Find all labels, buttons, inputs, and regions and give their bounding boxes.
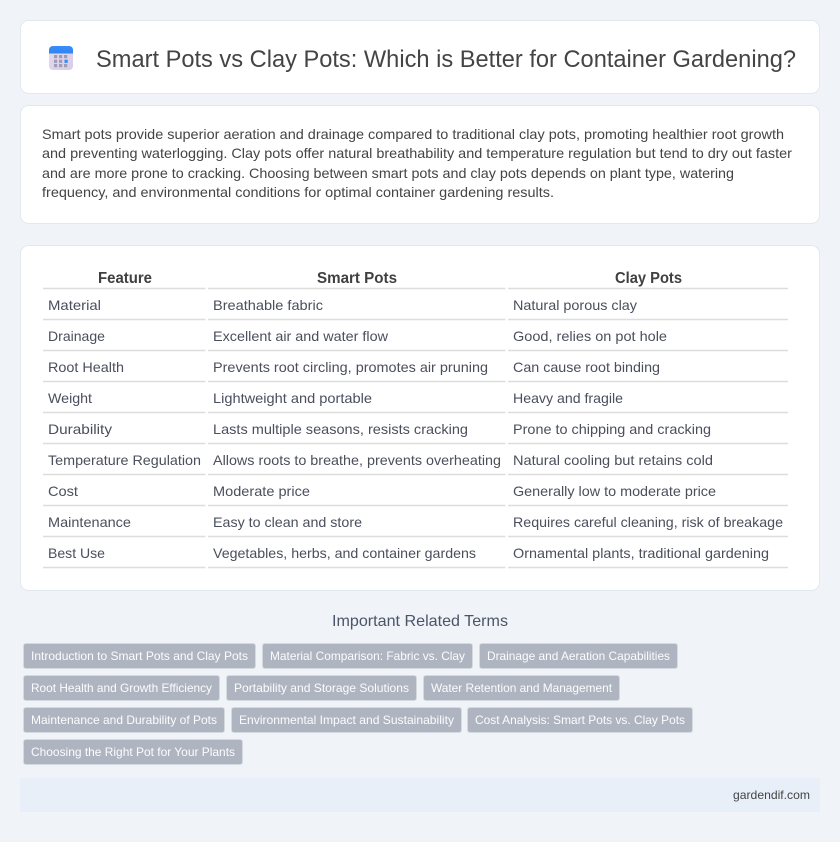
panel: summary text: frequency, and environmental conditions for optimal container gardening results. [42,184,554,200]
row: best use [48,545,769,561]
tags: related terms: Water Retention and Management [431,681,613,695]
table header row: Smart Pots [317,270,397,287]
row: durability: Prone to chipping and cracking [513,421,711,437]
panel: comparison table [20,246,820,590]
tags: related terms: Environmental Impact and Sustainability [239,713,454,727]
footer: gardendif.com [733,788,810,802]
row: drainage [48,328,667,344]
row: maintenance [48,514,783,530]
panel: summary text [20,106,820,224]
row: drainage: Good, relies on pot hole [513,328,667,344]
row: material: Natural porous clay [513,297,637,313]
tags: related terms: Portability and Storage Solutions [234,681,409,695]
row: material: Breathable fabric [213,297,323,313]
row: weight: Weight [48,390,92,406]
row: cost: Generally low to moderate price [513,483,716,499]
row: temperature regulation: Temperature Regulation [48,452,201,468]
row: weight: Lightweight and portable [213,390,372,406]
panel: header [20,20,820,94]
row: maintenance: Maintenance [48,514,131,530]
tags: related terms: Drainage and Aeration Capabilities [487,649,670,663]
row: durability: Lasts multiple seasons, resists cracking [213,421,468,437]
row: best use: Ornamental plants, traditional gardening [513,545,769,561]
table header row [98,270,682,287]
row: cost: Moderate price [213,483,310,499]
row: best use: Best Use [48,545,105,561]
row: root health: Prevents root circling, promotes air pruning [213,359,488,375]
panel: summary text: and are more prone to cracking. Choosing between smart pots and clay pots depends on plant type, watering [42,165,734,181]
row: cost: Cost [48,483,78,499]
row: root health: Can cause root binding [513,359,660,375]
table header row: Clay Pots [615,270,682,287]
row: best use: Vegetables, herbs, and container gardens [213,545,476,561]
tags: related terms: Choosing the Right Pot for Your Plants [31,745,235,759]
title: Smart Pots vs Clay Pots: Which is Better for Container Gardening? [96,46,796,73]
row: cost [48,483,716,499]
tags: related terms: Maintenance and Durability of Pots [31,713,217,727]
row: temperature regulation [48,452,713,468]
row: maintenance: Easy to clean and store [213,514,362,530]
heading: related terms: Important Related Terms [332,613,508,630]
footer [20,778,820,812]
tags: related terms: Root Health and Growth Efficiency [31,681,212,695]
row: durability [48,421,711,437]
row: durability: Durability [48,421,112,437]
row: material: Material [48,297,101,313]
row: material [48,297,637,313]
row: weight [48,390,623,406]
icon: calendar [49,46,73,70]
row: weight: Heavy and fragile [513,390,623,406]
row: temperature regulation: Natural cooling but retains cold [513,452,713,468]
row: root health: Root Health [48,359,124,375]
tags: related terms: Material Comparison: Fabric vs. Clay [270,649,465,663]
row: drainage: Excellent air and water flow [213,328,389,344]
row: maintenance: Requires careful cleaning, risk of breakage [513,514,783,530]
panel: summary text: and preventing waterlogging. Clay pots offer natural breathability and temperature regulation but tend to dry out faster [42,145,792,161]
table header row: Feature [98,270,152,287]
tags: related terms: Cost Analysis: Smart Pots vs. Clay Pots [475,713,685,727]
row: temperature regulation: Allows roots to breathe, prevents overheating [213,452,501,468]
tags: related terms: Introduction to Smart Pots and Clay Pots [31,649,248,663]
tags: related terms [24,644,692,764]
row: root health [48,359,660,375]
panel: summary text: Smart pots provide superior aeration and drainage compared to traditional clay pots, promoting healthier root growth [42,126,784,142]
row: drainage: Drainage [48,328,105,344]
